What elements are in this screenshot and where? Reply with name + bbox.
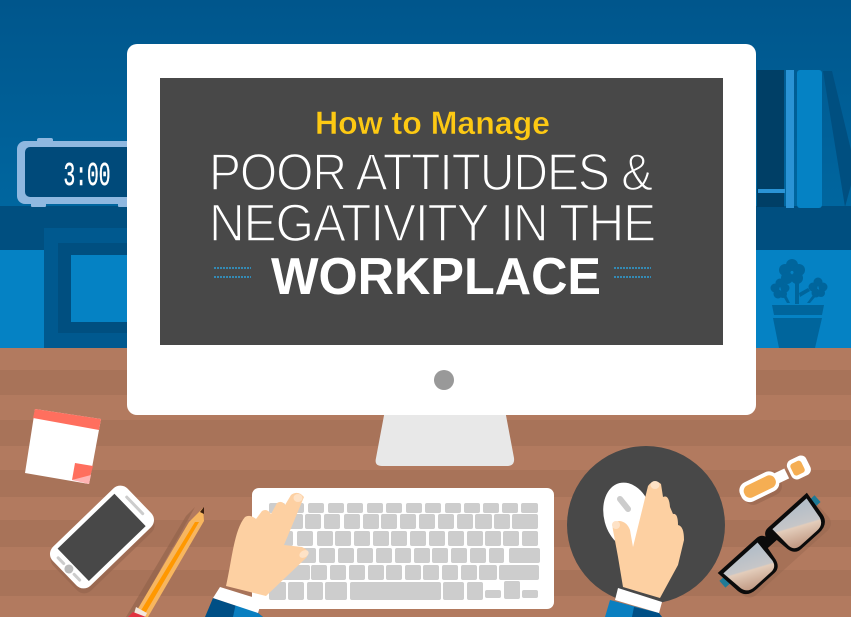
icon: alarm clock — [17, 138, 142, 207]
monitor stand — [376, 410, 514, 466]
title — [209, 105, 655, 306]
icon: picture frame — [44, 228, 134, 348]
title line: Negativity: NEGATIVITY IN THE — [209, 194, 655, 253]
icon: smartphone — [44, 481, 161, 598]
icon: glasses — [715, 490, 838, 607]
title line: Workplace: WORKPLACE — [271, 248, 601, 306]
title line: Poor Attitudes: POOR ATTITUDES & — [209, 144, 652, 202]
right hand on mouse — [605, 481, 684, 617]
dashed ornaments — [214, 268, 651, 277]
icon: sticky note — [25, 409, 101, 484]
screen panel — [160, 78, 723, 345]
right sleeve — [605, 600, 662, 617]
icon: pencil — [126, 507, 204, 617]
left cuff — [213, 587, 262, 613]
monitor body — [127, 44, 756, 415]
keyboard — [252, 488, 554, 609]
left palm and fingers — [226, 493, 308, 596]
mouse pad — [567, 446, 725, 604]
left hand on keyboard — [205, 493, 310, 617]
power button — [434, 370, 454, 390]
icon: books on shelf — [757, 70, 851, 208]
clock time: 3:00 — [64, 158, 110, 195]
monitor — [127, 44, 756, 466]
right palm and fingers — [613, 481, 684, 598]
wall background — [0, 0, 851, 349]
mouse — [596, 477, 660, 555]
desk surface — [0, 348, 851, 617]
title line: How to Manage: How to Manage — [315, 105, 550, 141]
icon: usb drive — [736, 453, 815, 509]
keys — [269, 503, 540, 600]
icon: potted plant — [770, 259, 828, 348]
right cuff — [615, 588, 662, 613]
left sleeve — [205, 598, 263, 617]
